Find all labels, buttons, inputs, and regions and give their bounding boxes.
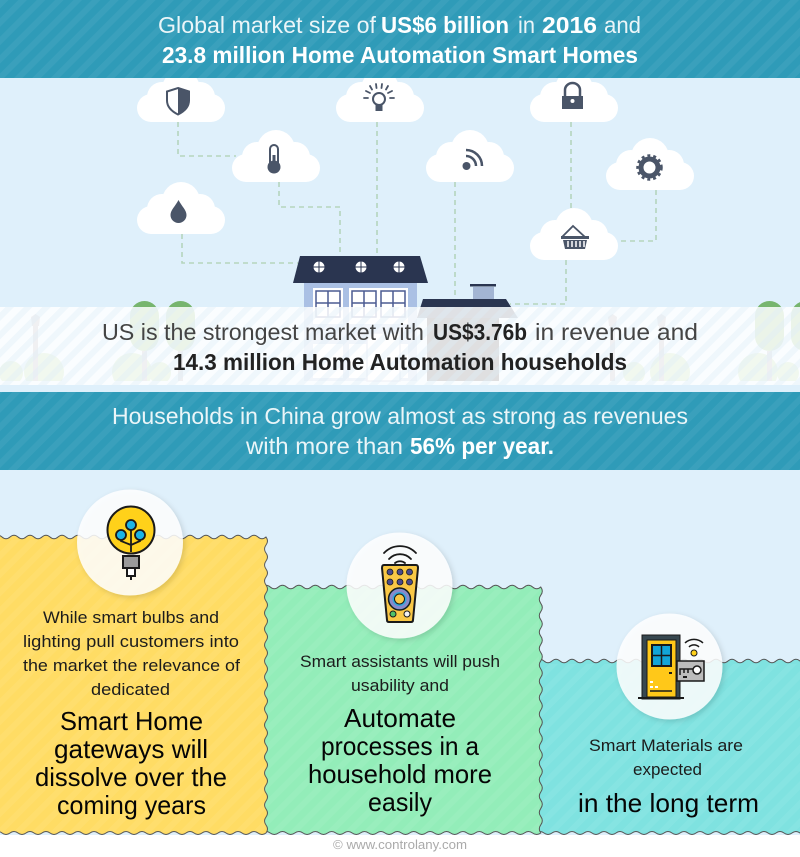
text: smart materials intro: [589, 736, 743, 779]
icon: remote control: [346, 532, 452, 638]
band: US market: [0, 307, 800, 385]
China line 1: Households in China grow almost as strong as revenues: [112, 403, 688, 429]
cloud: shopping basket: [530, 208, 618, 260]
icon: smart bulb: [77, 490, 183, 596]
US line 1: [102, 319, 698, 345]
panel: smart bulbs: [0, 535, 268, 834]
cloud: padlock: [530, 70, 618, 122]
house: [293, 256, 518, 381]
text: smart bulbs intro: dedicated: [91, 680, 170, 699]
heading line 1: US$6 billion: [381, 12, 509, 38]
text: smart assistants emphasis: Automate: [344, 703, 456, 733]
text: smart bulbs emphasis: coming years: [57, 790, 206, 820]
heading line 2: 23.8 million Home Automation Smart Homes: [162, 42, 638, 68]
illustration: connected smart home: [0, 70, 800, 391]
US line 1: in revenue and: [535, 319, 698, 345]
China line 2: 56% per year.: [410, 433, 554, 459]
text: smart assistants emphasis: household more: [308, 759, 492, 789]
icon: smart door: [616, 614, 722, 720]
text: smart materials emphasis: in the long term: [578, 788, 759, 818]
text: smart assistants emphasis: easily: [368, 787, 432, 817]
heading line 1: 2016: [542, 12, 597, 38]
band: global market size: [0, 0, 800, 78]
heading line 1: and: [604, 12, 641, 38]
text: smart bulbs emphasis: Smart Home: [60, 706, 203, 736]
text: smart bulbs intro: lighting pull customers into: [23, 632, 239, 651]
cloud: shield: [137, 70, 225, 122]
text: smart bulbs emphasis: dissolve over the: [35, 762, 227, 792]
text: smart assistants emphasis: [308, 703, 492, 817]
text: smart assistants intro: Smart assistants will push: [300, 652, 500, 671]
cloud: wifi: [426, 130, 514, 182]
text: smart materials intro: Smart Materials are: [589, 736, 743, 755]
text: smart bulbs intro: [23, 608, 240, 699]
China line 2: with more than: [245, 433, 403, 459]
US line 2: 14.3 million Home Automation households: [173, 349, 627, 375]
panel: smart materials: [536, 659, 800, 834]
band: China households: [0, 392, 800, 470]
text: smart assistants emphasis: processes in a: [321, 731, 479, 761]
footer credit: © www.controlany.com: [333, 837, 467, 852]
heading line 1: [158, 12, 641, 38]
cloud: water drop: [137, 182, 225, 234]
text: smart bulbs intro: the market the relevance of: [23, 656, 240, 675]
text: smart assistants intro: usability and: [351, 676, 449, 695]
China line 2: [245, 433, 554, 459]
text: smart bulbs intro: While smart bulbs and: [43, 608, 219, 627]
text: smart materials intro: expected: [633, 760, 702, 779]
text: smart bulbs emphasis: [35, 706, 227, 820]
heading line 1: Global market size of: [158, 12, 377, 38]
connector lines: [178, 122, 656, 304]
text: smart bulbs emphasis: gateways will: [54, 734, 208, 764]
US line 1: US$3.76b: [433, 319, 527, 345]
US line 1: US is the strongest market with: [102, 319, 424, 345]
cloud: light bulb: [336, 70, 424, 122]
text: smart assistants intro: [300, 652, 500, 695]
cloud: gear: [606, 138, 694, 190]
panel: smart assistants: [262, 585, 542, 835]
cloud: thermometer: [232, 130, 320, 182]
heading line 1: in: [518, 12, 535, 38]
trees and lamps: [0, 301, 800, 381]
